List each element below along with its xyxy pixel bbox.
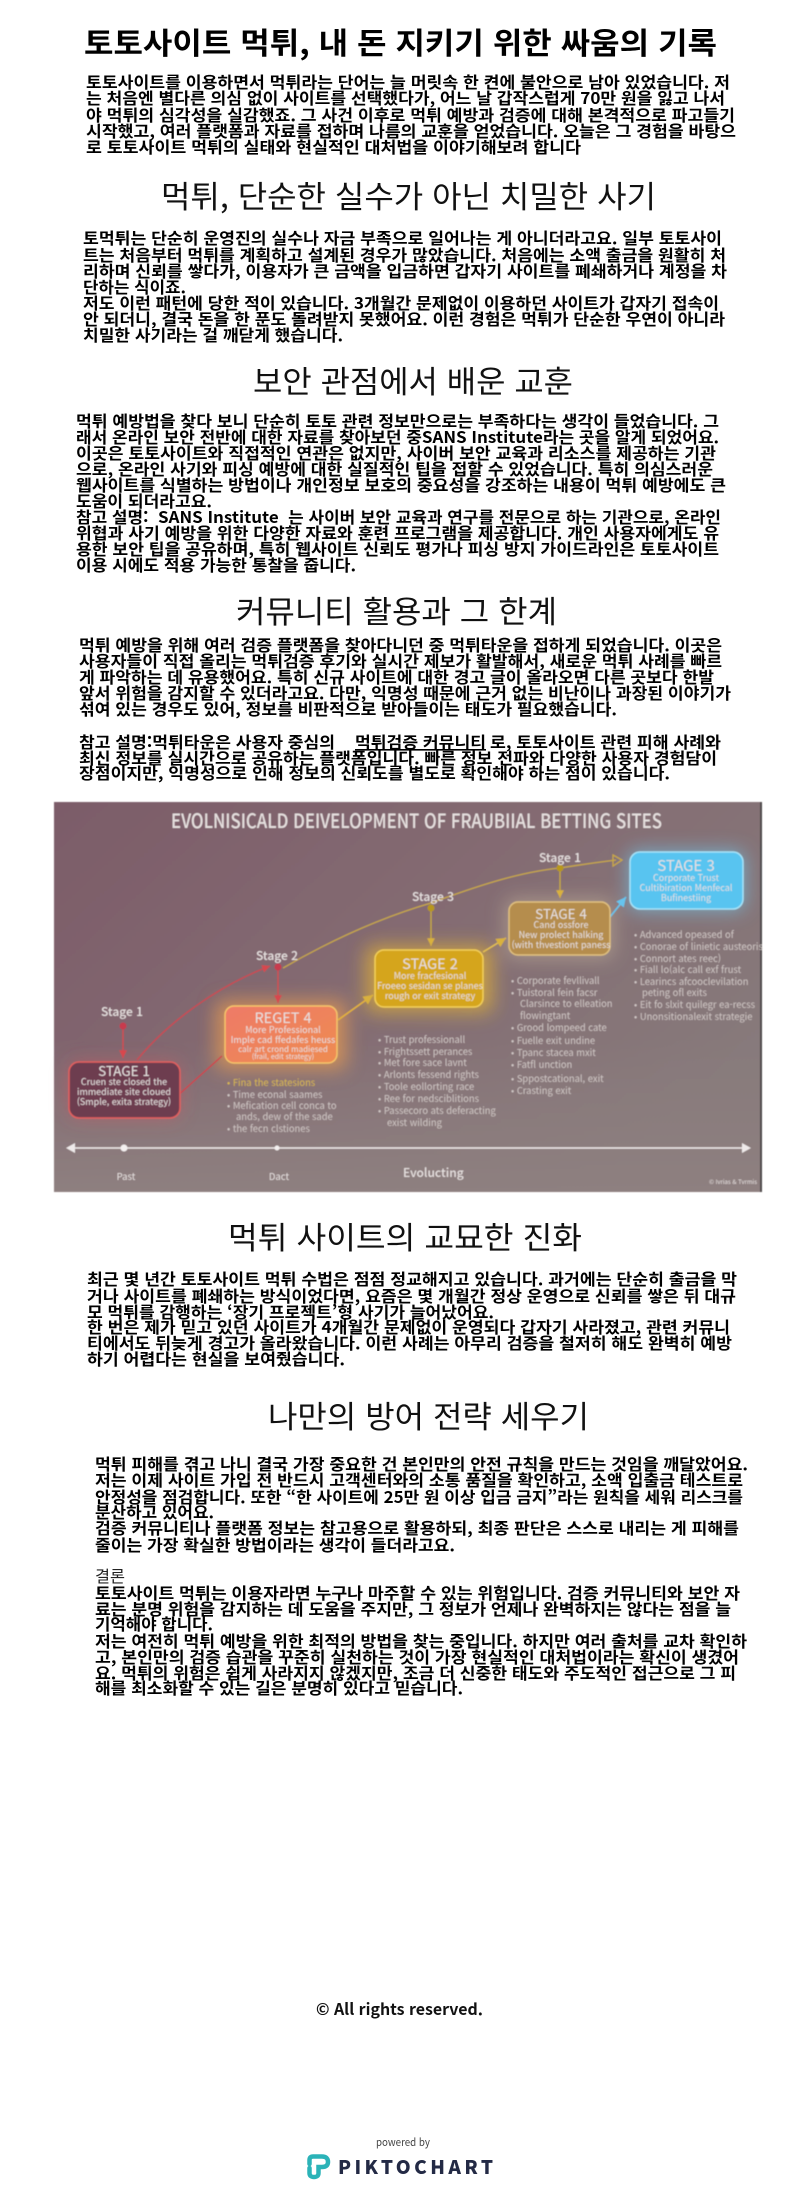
list: stage 3: • Connort ates reec) [634,951,721,965]
box: stage 2: More fracfesional [394,969,467,982]
text block: 교묘한 진화: 하기 어렵다는 현실을 보여줬습니다. [87,1346,345,1370]
heading: 치밀한 사기: 먹튀, 단순한 실수가 아닌 치밀한 사기 [161,172,656,217]
text block: 커뮤니티 [79,632,731,720]
text block: 방어 전략: 분산하고 있어요. [95,1499,214,1523]
list: stage 3: • Advanced opeased of [634,927,735,941]
text block: 보안 관점: 먹튀 예방법을 찾다 보니 단순히 토토 관련 정보만으로는 부족하다는 생각이 들었습니다. 그 [76,408,719,432]
heading: 교묘한 진화: 먹튀 사이트의 교묘한 진화 [228,1213,582,1258]
text block: 교묘한 진화: 거나 사이트를 폐쇄하는 방식이었다면, 요즘은 몇 개월간 정상 운영으로 신뢰를 쌓은 뒤 대규 [87,1283,736,1307]
list: stage 2 [378,1032,497,1129]
text block: 커뮤니티: 섞여 있는 경우도 있어, 정보를 비판적으로 받아들이는 태도가 필요했습니다. [79,696,617,720]
list: stage 4: • Tuistoral fein facsr [511,985,598,999]
heading: 보안 관점: 보안 관점에서 배운 교훈 [253,357,573,402]
text block: 커뮤니티: 사용자들이 직접 올리는 먹튀검증 후기와 실시간 제보가 활발해서, 새로운 먹튀 사례를 빠르 [79,648,722,672]
chart title: EVOLNISICALD DEIVELOPMENT OF FRAUBIIAL BETTING SITES [171,805,662,834]
text block: 방어 전략: 먹튀 피해를 겪고 나니 결국 가장 중요한 건 본인만의 안전 규칙을 만드는 것임을 깨달았어요. [95,1451,748,1475]
text block: 보안 관점: 위협과 사기 예방을 위한 다양한 자료와 훈련 프로그램을 제공합니다. 개인 사용자에게도 유 [76,520,719,544]
box: stage 1 [69,1060,180,1118]
text block: 결론: 저는 여전히 먹튀 예방을 위한 최적의 방법을 찾는 중입니다. 하지만 여러 출처를 교차 확인하 [95,1628,747,1652]
box: reget 4 [225,1006,337,1063]
text block: 치밀한 사기: 저도 이런 패턴에 당한 적이 있습니다. 3개월간 문제없이 이용하던 사이트가 갑자기 접속이 [83,290,719,314]
powered by: powered by [376,2134,430,2150]
stage labels: Stage 1 [101,1003,143,1020]
text block: 보안 관점: 웹사이트를 식별하는 방법이나 개인정보 보호의 중요성을 강조하는 내용이 먹튀 예방에도 큰 [76,472,726,496]
text block: 참고 설명 먹튀타운: 장점이지만, 익명성으로 인해 정보의 신뢰도를 별도로 확인해야 하는 점이 있습니다. [79,760,670,784]
text block: 치밀한 사기: 리하며 신뢰를 쌓다가, 이용자가 큰 금액을 입금하면 갑자기 사이트를 폐쇄하거나 계정을 차 [83,258,727,282]
box: stage 2 [375,950,483,1007]
list: reget 4: • the fecn clstiones [227,1121,310,1135]
box: stage 4 [509,902,610,955]
text block: introduction [86,69,736,158]
list: stage 2: • Met fore sace lavnt [378,1055,467,1069]
list: stage 4: Clarsince to elleation [520,996,612,1010]
title: 토토사이트 먹튀, 내 돈 지키기 위한 싸움의 기록 [84,19,717,63]
box: stage 3: Bufinestiing [661,891,711,904]
text block: 보안 관점: 용한 보안 팁을 공유하며, 특히 웹사이트 신뢰도 평가나 피싱 방지 가이드라인은 토토사이트 [76,536,719,560]
box: stage 3: Corporate Trust [653,871,720,884]
box: stage 1: STAGE 1 [98,1060,150,1080]
text block: 교묘한 진화: 최근 몇 년간 토토사이트 먹튀 수법은 점점 정교해지고 있습니다. 과거에는 단순히 출금을 막 [87,1266,737,1290]
list: stage 2: exist wilding [387,1115,443,1129]
text block: 커뮤니티: 앞서 위험을 감지할 수 있더라고요. 다만, 익명성 때문에 근거 없는 비난이나 과장된 이야기가 [79,680,731,704]
list: reget 4: • Mefication cell conca to [227,1098,337,1112]
box: stage 2: Froeeo sesidan se planes [377,979,483,992]
box: stage 1: (Smple, exita strategy) [77,1095,171,1108]
stage labels: Stage 3 [412,888,454,905]
stage labels: Stage 1 [539,849,581,866]
list: stage 2: • Ree for nedsciblitions [378,1091,480,1105]
box: reget 4: REGET 4 [254,1007,312,1028]
heading: 방어 전략: 나만의 방어 전략 세우기 [268,1392,589,1437]
list: stage 2: • Arlonts fessend rights [378,1067,480,1081]
text block: 보안 관점: 이용 시에도 적용 가능한 통찰을 줍니다. [76,552,356,576]
text block: 보안 관점: 참고 설명: SANS Institute 는 사이버 보안 교육과 연구를 전문으로 하는 기관으로, 온라인 [76,504,721,528]
list: stage 2: • Trust professionall [378,1032,465,1046]
text block: 방어 전략: 저는 이제 사이트 가입 전 반드시 고객센터와의 소통 품질을 확인하고, 소액 입출금 테스트로 [95,1467,743,1491]
list: stage 3 [634,927,763,1023]
progression curve [92,855,622,1115]
text block: 커뮤니티: 게 파악하는 데 유용했어요. 특히 신규 사이트에 대한 경고 글이 올라오면 다른 곳보다 한발 [79,664,714,688]
stage pins [120,864,564,1030]
text block: 참고 설명 먹튀타운: 참고 설명:먹튀타운은 사용자 중심의 [79,729,335,753]
list: stage 4 [511,973,612,1097]
text block: 교묘한 진화 [87,1266,737,1370]
stage labels: Stage 2 [256,947,298,964]
text block: 교묘한 진화: 모 먹튀를 감행하는 ‘장기 프로젝트’형 사기가 늘어났어요. [87,1299,494,1323]
text block: 방어 전략: 안정성을 점검합니다. 또한 “한 사이트에 25만 원 이상 입금 금지”라는 원칙을 세워 리스크를 [95,1484,743,1508]
text block: 방어 전략: 검증 커뮤니티나 플랫폼 정보는 참고용으로 활용하되, 최종 판단은 스스로 내리는 게 피해를 [95,1515,739,1539]
list: stage 3: • Fiall lo(alc call exf frust [634,962,742,976]
box: reget 4: (frail, edit strategy) [252,1052,314,1062]
copyright: © All rights reserved. [316,1996,483,2020]
text block: introduction: 토토사이트를 이용하면서 먹튀라는 단어는 늘 머릿속 한 켠에 불안으로 남아 있었습니다. 저 [86,69,730,93]
box: stage 1: Cruen ste closed the [81,1075,167,1088]
timeline axis [66,1143,757,1186]
list: stage 4: • Sppostcational, exit [511,1071,604,1085]
list: stage 3: • Conorae of linietic austeoris [634,939,763,953]
text block: 결론: 고, 본인만의 검증 습관을 꾸준히 실천하는 것이 가장 현실적인 대처법이라는 확신이 생겼어 [95,1644,739,1668]
list: stage 3: peting ofl exits [642,985,707,999]
list: stage 4: • Corporate fevllivall [511,973,600,987]
box glows [69,850,745,1118]
text block: introduction: 는 처음엔 별다른 의심 없이 사이트를 선택했다가, 어느 날 갑작스럽게 70만 원을 잃고 나서 [86,85,725,109]
box: stage 2: rough or exit strategy [385,989,475,1002]
text block: 교묘한 진화: 한 번은 제가 믿고 있던 사이트가 4개월간 문제없이 운영되다 갑자기 사라졌고, 관련 커뮤니 [87,1314,730,1338]
text block: 치밀한 사기: 단하는 식이죠. [83,274,186,298]
box: stage 3: STAGE 3 [657,855,715,876]
text block: 치밀한 사기: 트는 처음부터 먹튀를 계획하고 설계된 경우가 많았습니다. 처음에는 소액 출금을 원활히 처 [83,242,726,266]
list: stage 3: • Eit fo slxit quilegr ea-recss [634,997,756,1011]
list: stage 2: • Passecoro ats deferacting [378,1103,497,1117]
text block: 치밀한 사기: 안 되더니, 결국 돈을 한 푼도 돌려받지 못했어요. 이런 경험은 먹튀가 단순한 우연이 아니라 [83,306,725,330]
text block: 보안 관점: 으로, 온라인 사기와 피싱 예방에 대한 실질적인 팁을 접할 수 있었습니다. 특히 의심스러운 [76,456,713,480]
box: stage 2: STAGE 2 [402,953,458,974]
list: stage 4: • Crasting exit [511,1083,572,1097]
text block: 커뮤니티: 먹튀 예방을 위해 여러 검증 플랫폼을 찾아다니던 중 먹튀타운을 접하게 되었습니다. 이곳은 [79,632,722,656]
box: stage 4: New prolect halking [519,928,603,941]
subheading: 결론: 결론 [95,1563,125,1587]
wordmark: piktochart: PIKTOCHART [338,2153,493,2180]
text block: introduction: 야 먹튀의 심각성을 실감했죠. 그 사건 이후로 먹튀 예방과 검증에 대해 본격적으로 파고들기 [86,102,735,126]
list: reget 4: • Fina the statesions [227,1075,316,1089]
text block: 보안 관점: 이곳은 토토사이트와 직접적인 연관은 없지만, 사이버 보안 교육과 리소스를 제공하는 기관 [76,440,716,464]
box: stage 4: Cand ossfore [534,918,588,931]
list: stage 4: flowingtant [520,1008,571,1022]
heading: 커뮤니티: 커뮤니티 활용과 그 한계 [236,587,557,632]
stage labels [101,849,581,1020]
box: stage 1: immediate site cloued [77,1085,171,1098]
box: reget 4: calr art crond madiesed [238,1044,328,1055]
text block: 치밀한 사기: 토먹튀는 단순히 운영진의 실수나 자금 부족으로 일어나는 게 아니더라고요. 일부 토토사이 [83,225,722,249]
list: reget 4: ands, dew of the sade [236,1109,333,1123]
box: stage 3 [630,852,743,909]
box: stage 4: STAGE 4 [535,903,587,923]
underlined link: 먹튀검증 커뮤니티 [355,729,486,753]
text block: 치밀한 사기 [83,225,727,346]
timeline axis: Past [117,1169,136,1183]
text block: introduction: 로 토토사이트 먹튀의 실태와 현실적인 대처법을 이야기해보려 합니다 [86,134,581,158]
box: reget 4: More Professional [245,1023,321,1036]
text block: 교묘한 진화: 티에서도 뒤늦게 경고가 올라왔습니다. 이런 사례는 아무리 검증을 철저히 해도 완벽히 예방 [87,1330,732,1354]
list: stage 2: • Toole eollorting race [378,1079,474,1093]
text block: 보안 관점: 래서 온라인 보안 전반에 대한 자료를 찾아보던 중SANS Institute라는 곳을 알게 되었어요. [76,424,719,448]
list: stage 2: • Frightssett perances [378,1044,473,1058]
text block: 참고 설명 먹튀타운: 최신 정보를 실시간으로 공유하는 플랫폼입니다. 빠른 정보 전파와 다양한 사용자 경험담이 [79,745,717,769]
icon: piktochart logo [310,2156,328,2177]
box: stage 3: Cultibiration Menfecal [640,881,733,894]
box: stage 4: (with thvestiont paness [512,938,610,951]
text block: 치밀한 사기: 치밀한 사기라는 걸 깨닫게 했습니다. [83,322,343,346]
text block: 결론: 료는 분명 위험을 감지하는 데 도움을 주지만, 그 정보가 언제나 완벽하지는 않다는 점을 늘 [95,1596,731,1620]
text block: 결론: 해를 최소화할 수 있는 길은 분명히 있다고 믿습니다. [95,1675,463,1699]
text block: 결론: 기억해야 합니다. [95,1611,213,1635]
text block: 보안 관점: 도움이 되더라고요. [76,488,212,512]
text block: 방어 전략: 줄이는 가장 확실한 방법이라는 생각이 들더라고요. [95,1532,455,1556]
timeline axis: Dact [269,1169,290,1183]
connector arrows [123,870,626,1058]
list: stage 4: • Fuelle exit undine [511,1033,595,1047]
box: reget 4: Imple cad ffedafes heuss [231,1033,335,1046]
text block: 참고 설명 먹튀타운 [79,729,721,784]
chart image: evolution of fraudulent betting sites [54,802,763,1192]
text block: introduction: 시작했고, 여러 플랫폼과 자료를 접하며 나름의 교훈을 얻었습니다. 오늘은 그 경험을 바탕으 [86,118,736,142]
list: stage 3: • Learincs afcooclevilation [634,974,748,988]
list: stage 4: • Tpanc stacea mxit [511,1045,596,1059]
timeline axis: © Ivrias & Tvrmis [709,1177,757,1186]
timeline axis: Evolucting [403,1164,464,1181]
list: stage 4: • Fatfl unction [511,1057,572,1071]
text block: 결론 [95,1580,747,1699]
list: stage 3: • Unonsitionalexit strategie [634,1009,752,1023]
text block: 참고 설명 먹튀타운: 로, 토토사이트 관련 피해 사례와 [490,729,721,753]
text block: 결론: 요. 먹튀의 위험은 쉽게 사라지지 않겠지만, 조금 더 신중한 태도와 주도적인 접근으로 그 피 [95,1660,736,1684]
list: stage 4: • Grood lompeed cate [511,1020,607,1034]
text block: 보안 관점 [76,408,726,576]
text block: 결론: 토토사이트 먹튀는 이용자라면 누구나 마주할 수 있는 위험입니다. 검증 커뮤니티와 보안 자 [95,1580,740,1604]
text block: 방어 전략 [95,1451,748,1556]
list: reget 4 [227,1075,337,1135]
list: reget 4: • Time econal saames [227,1087,323,1101]
